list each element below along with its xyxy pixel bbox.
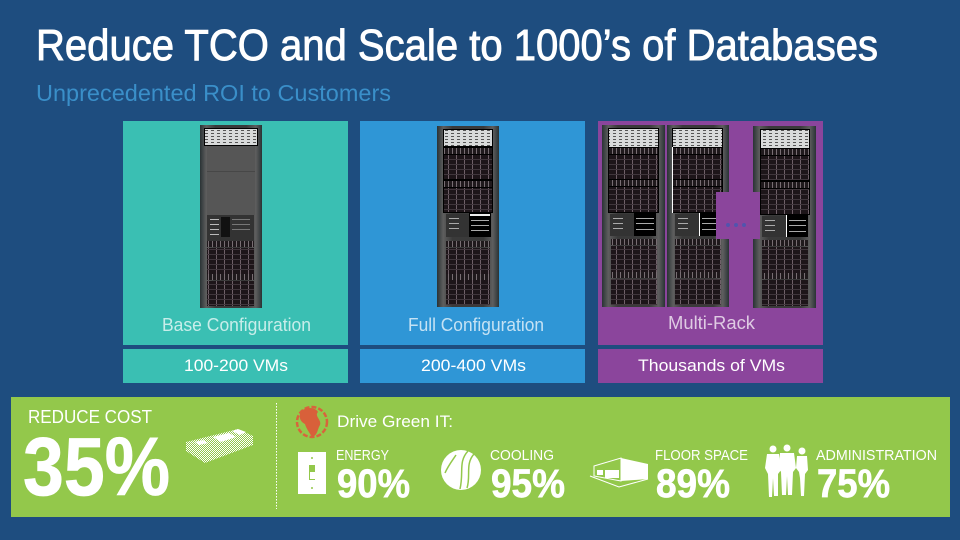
metric: floor space: 89%: [656, 462, 730, 506]
rack: multi 1: [602, 125, 665, 307]
panel: savings band: [11, 397, 950, 517]
strip: 100-200 VMs: [123, 349, 348, 383]
panel: multi-rack: [598, 121, 823, 345]
rack: multi 3: [753, 126, 816, 308]
metric: floor space: [655, 448, 748, 506]
rack: base: [200, 125, 262, 308]
icon: globe: [297, 407, 327, 437]
metric: administration: 75%: [817, 462, 890, 506]
strip: thousands of VMs: [598, 349, 823, 383]
label: full configuration: Full Configuration: [408, 315, 544, 335]
metric: administration: ADMINISTRATION: [816, 448, 937, 464]
panel: base configuration: [123, 121, 348, 345]
reduce cost value: 35%: [23, 420, 170, 513]
panel: full configuration: [360, 121, 585, 345]
label: multi-rack: Multi-Rack: [668, 313, 756, 333]
strip: 200-400 VMs: [360, 349, 585, 383]
icon: stack of money: [186, 429, 253, 463]
metric: energy: [336, 448, 410, 506]
strip: 100-200 VMs: 100-200 VMs: [184, 356, 288, 375]
label: base configuration: Base Configuration: [162, 315, 311, 335]
metric: energy: ENERGY: [336, 448, 389, 464]
metric: administration: [816, 448, 937, 506]
reduce cost label: REDUCE COST: [28, 407, 152, 427]
strip: thousands of VMs: Thousands of VMs: [638, 356, 785, 375]
subtitle: Unprecedented ROI to Customers: [36, 80, 391, 106]
metric: energy: 90%: [337, 462, 410, 506]
metric: cooling: 95%: [491, 462, 565, 506]
drive green IT heading: Drive Green IT:: [337, 412, 453, 431]
rack: multi 2: [667, 125, 729, 307]
icon: light switch: [298, 452, 326, 494]
icon: data center building: [590, 458, 648, 487]
metric: cooling: COOLING: [490, 448, 554, 464]
rack: full: [437, 126, 499, 307]
metric: floor space: FLOOR SPACE: [655, 448, 748, 464]
icon: people: [765, 444, 808, 497]
icon: cooling: [441, 450, 481, 490]
strip: 200-400 VMs: 200-400 VMs: [421, 356, 526, 375]
ellipsis box: [716, 192, 760, 239]
title: Reduce TCO and Scale to 1000’s of Databases: [36, 21, 878, 70]
divider: [276, 403, 278, 509]
